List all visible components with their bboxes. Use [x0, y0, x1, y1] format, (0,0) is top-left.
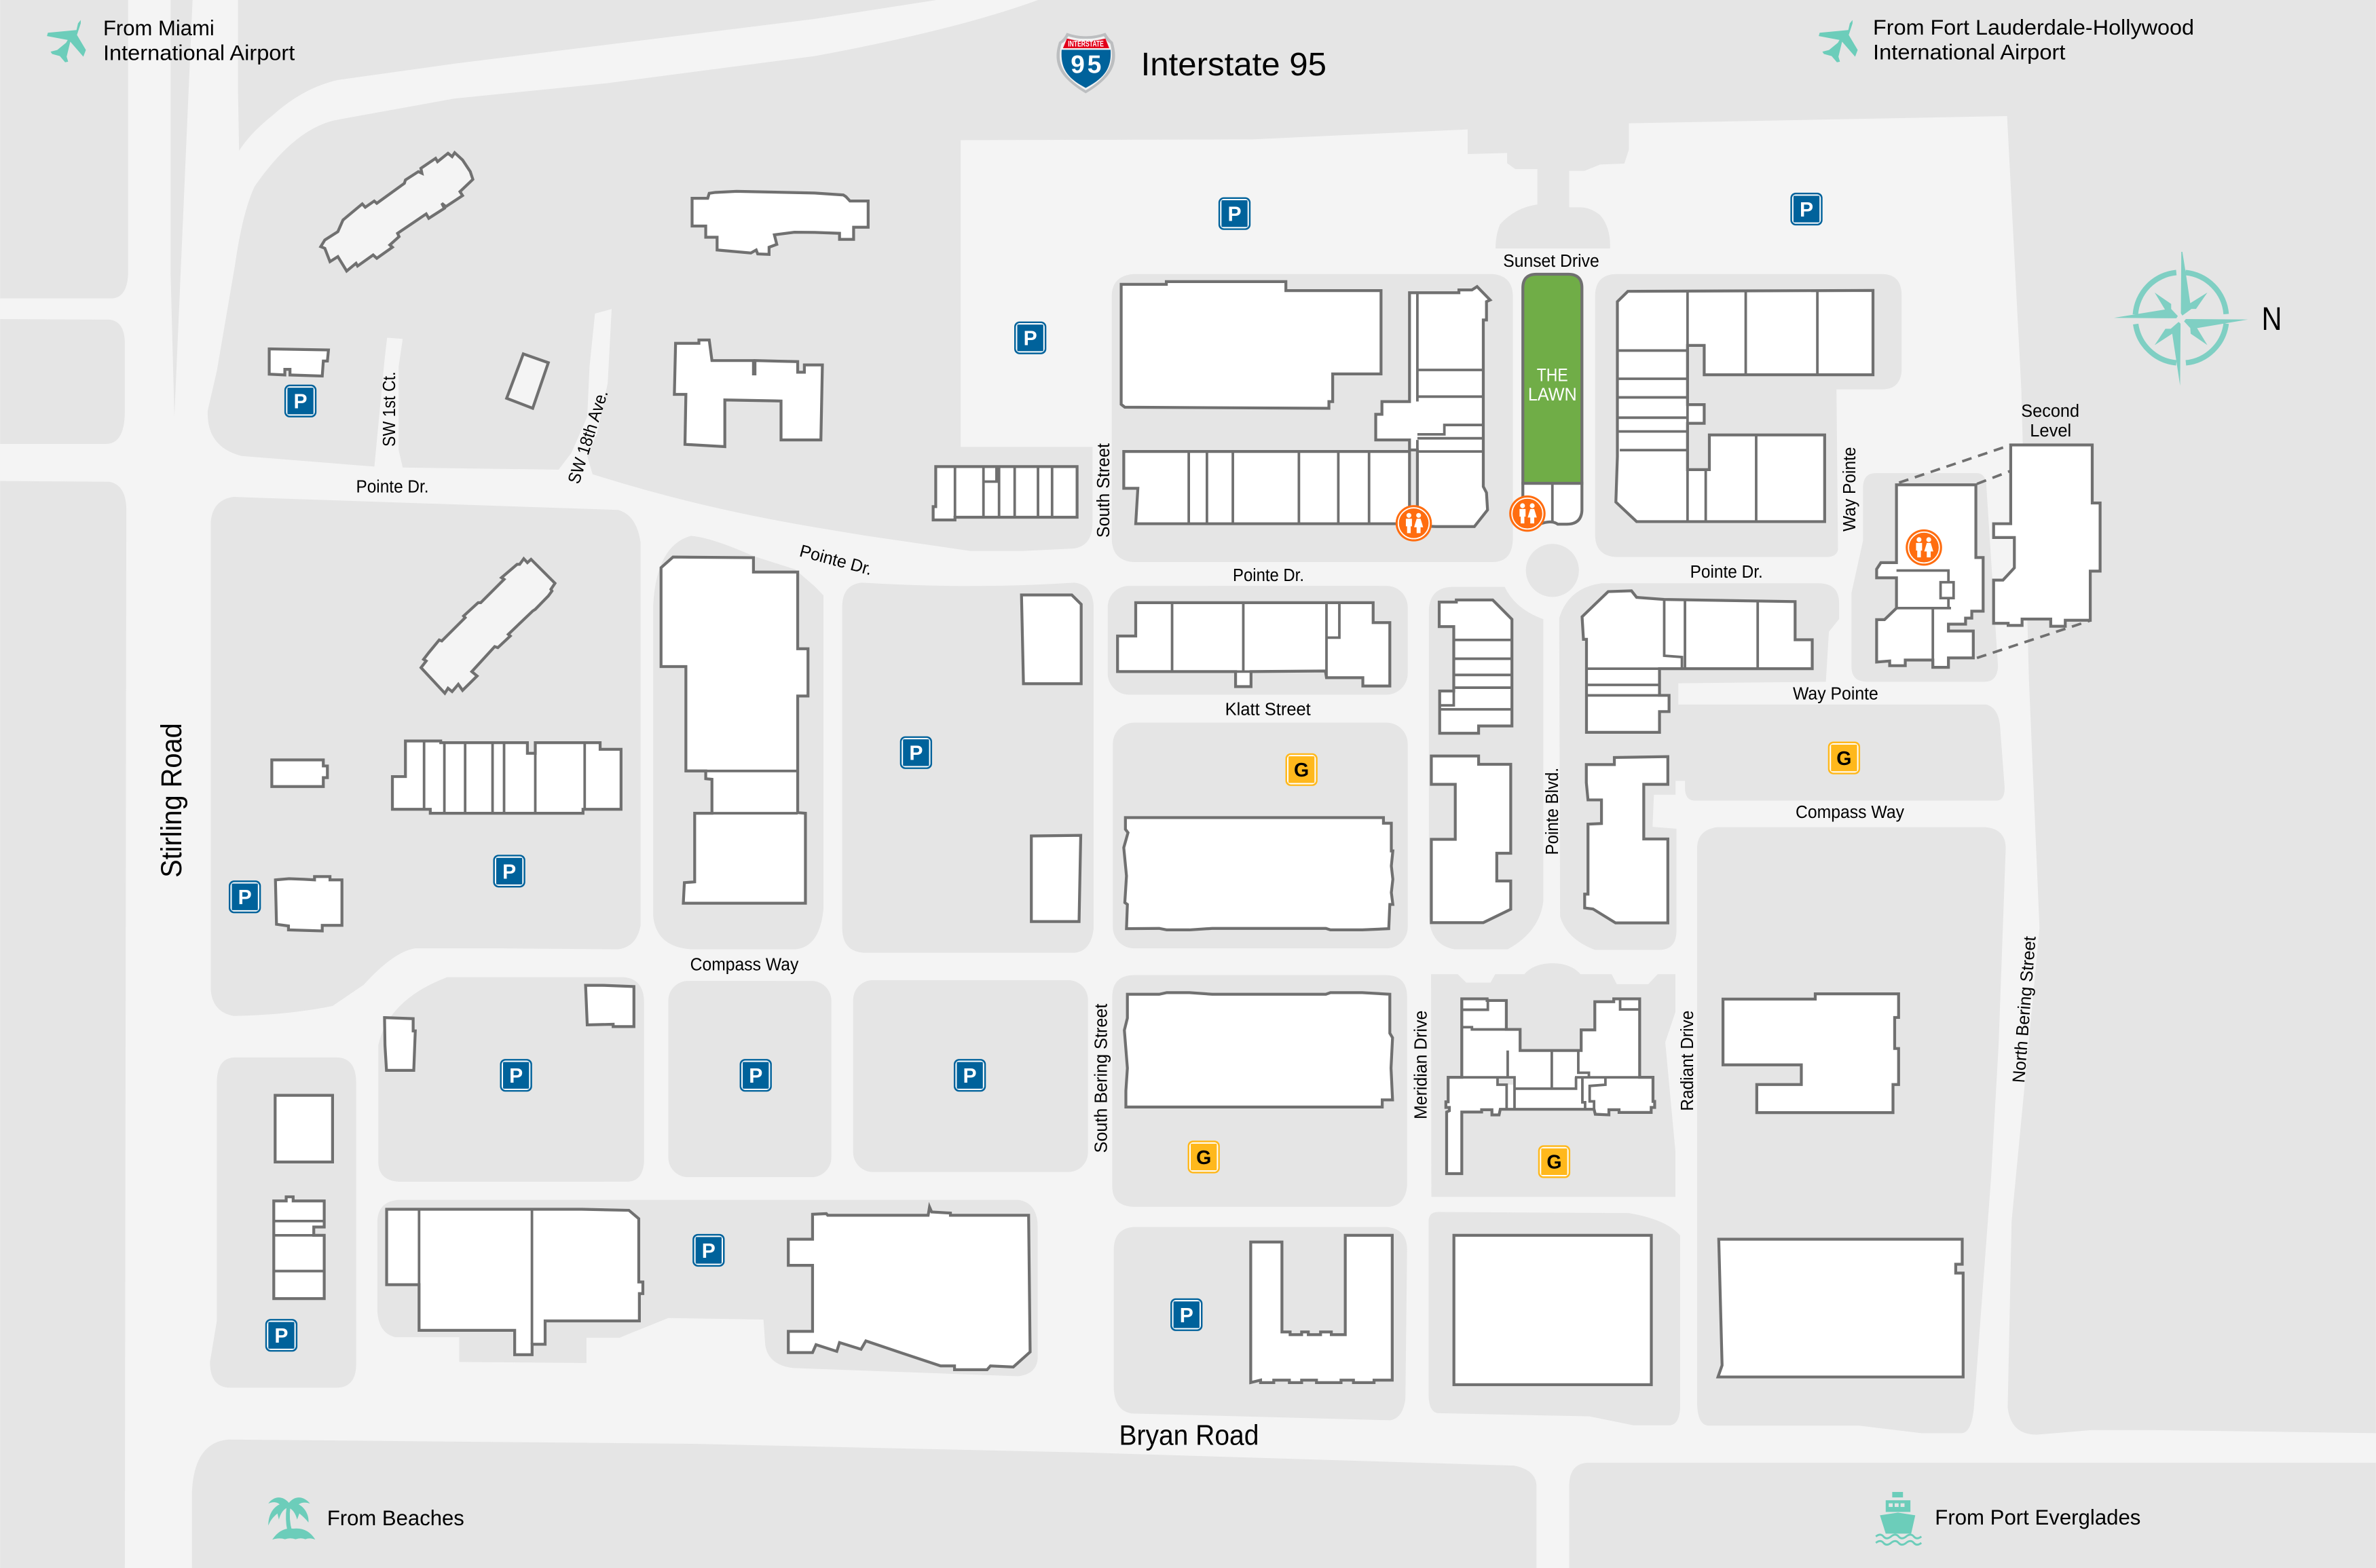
building: Klatt Street row — [1117, 603, 1390, 686]
label: North Bering Street: North Bering Street — [2009, 935, 2040, 1083]
label: Stirling Road: Stirling Road — [155, 723, 187, 878]
icon: plane Fort Lauderdale — [1819, 20, 1857, 62]
building: row far south-west — [274, 1197, 324, 1299]
building: central block south row — [1124, 451, 1409, 524]
icon: garage 2 — [1828, 742, 1860, 774]
icon: parking 3 — [1014, 322, 1046, 354]
label: Pointe Dr. west: Pointe Dr. — [356, 477, 429, 496]
icon: parking 2: P — [1800, 199, 1813, 221]
icon: garage 3: G — [1196, 1147, 1211, 1169]
icon: parking 12 — [1170, 1299, 1202, 1331]
label: Klatt Street: Klatt Street — [1225, 700, 1311, 719]
icon: garage 4: G — [1546, 1152, 1562, 1174]
icon: garage 3 — [1188, 1140, 1220, 1174]
building: east of South Street south — [1031, 836, 1081, 922]
label: Way Pointe vertical: Way Pointe — [1840, 447, 1859, 531]
icon: parking 13: P — [274, 1325, 288, 1347]
icon: garage 2: G — [1836, 748, 1852, 770]
icon: parking 9 — [740, 1059, 772, 1091]
label: Meridian Drive: Meridian Drive — [1412, 1011, 1431, 1119]
icon: parking 11 — [692, 1234, 724, 1267]
label: Compass Way west: Compass Way — [690, 956, 799, 975]
label: Compass Way east: Compass Way — [1796, 803, 1904, 822]
building: square west — [275, 1096, 333, 1162]
building: garage block north — [1124, 818, 1393, 930]
icon: compass rose — [2114, 252, 2248, 386]
icon: garage 1: G — [1294, 760, 1309, 781]
label: from Miami — [103, 16, 295, 64]
icon: cruise ship — [1876, 1492, 1921, 1545]
label: Second Level: Level — [2030, 422, 2071, 441]
icon: Interstate 95 shield: INTERSTATE — [1068, 40, 1104, 49]
icon: restrooms 1 — [1396, 505, 1432, 542]
building: east of Pointe Blvd south — [1584, 757, 1668, 923]
label: SW 18th Ave.: SW 18th Ave. — [565, 388, 612, 486]
icon: parking 1: P — [1227, 204, 1242, 226]
icon: parking 4 — [284, 385, 316, 417]
label: Sunset Drive: Sunset Drive — [1503, 252, 1599, 271]
label: SW 1st Ct.: SW 1st Ct. — [380, 371, 399, 447]
icon: parking 2 — [1790, 193, 1823, 225]
building: west of Pointe Blvd south — [1431, 756, 1510, 922]
icon: parking 8 — [500, 1059, 532, 1091]
building: large top-left of central block — [1121, 282, 1381, 408]
building: south-west large right — [788, 1207, 1030, 1370]
building: east of Pointe Blvd north — [1582, 591, 1813, 732]
label: From Beaches: From Beaches — [327, 1506, 464, 1530]
label: THE LAWN: LAWN — [1528, 384, 1577, 405]
building: near Stirling parking — [276, 876, 342, 931]
building: central block east strip — [1376, 286, 1490, 527]
building: east of Radiant Drive — [1723, 994, 1899, 1113]
label: north: N — [2262, 301, 2282, 337]
building: The Lawn south pavilion — [1523, 483, 1582, 524]
icon: parking 4: P — [294, 391, 308, 413]
building: tall central-west — [661, 557, 808, 903]
icon: parking 10 — [954, 1059, 986, 1091]
icon: Interstate 95 shield — [1056, 33, 1115, 93]
building: large rectangle south-east — [1718, 1239, 1963, 1377]
label: from Fort Lauderdale: From Fort Lauderdale-Hollywood — [1873, 16, 2194, 39]
icon: plane Miami — [47, 20, 86, 62]
label: Second Level — [2021, 402, 2079, 441]
label: from Miami: From Miami — [103, 16, 215, 40]
label: Pointe Dr. angled: Pointe Dr. — [798, 542, 874, 579]
label: Second Level: Second — [2021, 402, 2079, 421]
label: From Port Everglades: From Port Everglades — [1935, 1506, 2140, 1529]
label: Bryan Road: Bryan Road — [1119, 1419, 1259, 1451]
building: Way Pointe ground level — [1876, 485, 1983, 668]
building: top centre — [692, 191, 868, 255]
icon: parking 5: P — [909, 743, 923, 765]
icon: garage 1 — [1286, 753, 1318, 786]
label: Pointe Blvd.: Pointe Blvd. — [1543, 768, 1562, 855]
building: small tilted — [506, 354, 549, 408]
icon: parking 7: P — [238, 886, 252, 909]
building: row by South Street — [933, 466, 1077, 520]
icon: garage 4 — [1538, 1145, 1570, 1178]
icon: restrooms 2 — [1509, 496, 1546, 531]
label: Pointe Dr. east: Pointe Dr. — [1690, 563, 1763, 582]
label: South Bering Street: South Bering Street — [1092, 1004, 1111, 1153]
building: stepped units west of Pointe Blvd — [1439, 600, 1512, 733]
building: U shape south — [1250, 1235, 1392, 1383]
label: South Street: South Street — [1094, 443, 1113, 538]
icon: parking 3: P — [1024, 328, 1037, 350]
green space: The Lawn — [1523, 274, 1582, 483]
building: diagonal tower south — [421, 559, 555, 693]
icon: palm tree — [268, 1497, 315, 1539]
icon: parking 1 — [1219, 198, 1250, 230]
building: row west — [392, 741, 621, 813]
icon: parking 5 — [900, 736, 932, 769]
icon: parking 6 — [493, 855, 525, 887]
label: Radiant Drive: Radiant Drive — [1678, 1011, 1697, 1111]
building: east retail block — [1616, 291, 1873, 521]
building: east of South Street north — [1022, 595, 1081, 684]
building: U shape north — [674, 340, 822, 447]
icon: parking 10: P — [963, 1065, 977, 1087]
icon: parking 9: P — [749, 1065, 762, 1087]
icon: parking 6: P — [502, 861, 516, 883]
building: small south-west B — [384, 1018, 415, 1070]
building: Meridian complex — [1446, 998, 1654, 1174]
label: THE LAWN — [1528, 365, 1577, 405]
building: Way Pointe second level — [1994, 445, 2100, 627]
icon: parking 13 — [265, 1319, 297, 1351]
label: THE LAWN: THE — [1537, 365, 1568, 385]
label: Pointe Dr. centre: Pointe Dr. — [1233, 566, 1304, 585]
icon: parking 12: P — [1180, 1305, 1193, 1327]
building: small near SW 1st Ct — [270, 349, 329, 376]
label: from Fort Lauderdale — [1873, 16, 2194, 64]
building: garage block south — [1124, 992, 1392, 1107]
icon: parking 8: P — [509, 1065, 523, 1087]
building: diagonal tower north — [320, 153, 473, 271]
icon: restrooms 3 — [1906, 529, 1942, 565]
building: small west — [272, 760, 327, 787]
label: from Miami: International Airport — [103, 41, 295, 64]
label: Interstate 95: Interstate 95 — [1141, 47, 1326, 83]
icon: parking 11: P — [702, 1240, 716, 1263]
building: south-west large left — [387, 1209, 643, 1355]
dashed lines linking levels — [1899, 445, 2092, 658]
icon: Interstate 95 shield: 95 — [1071, 50, 1101, 78]
building: large square south — [1454, 1235, 1652, 1385]
building: small south-west A — [586, 986, 634, 1026]
label: from Fort Lauderdale: International Airport — [1873, 40, 2066, 64]
icon: parking 7 — [229, 880, 261, 913]
label: Way Pointe horizontal: Way Pointe — [1793, 684, 1878, 703]
